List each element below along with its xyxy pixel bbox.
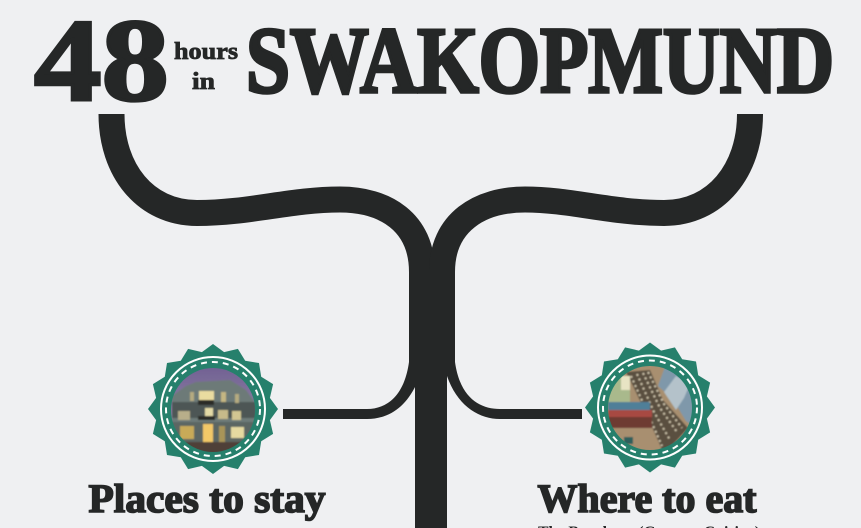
title small word hours: hours	[174, 39, 238, 65]
photo: seaside restaurant	[608, 366, 692, 450]
heading: places to stay: Places to stay	[88, 476, 326, 521]
badge white ring right	[598, 356, 702, 460]
upper left branch	[112, 114, 422, 272]
badge white ring left	[161, 357, 265, 461]
badge star right	[585, 342, 715, 472]
title small word in: in	[192, 69, 215, 95]
heading: where to eat: Where to eat	[538, 476, 757, 521]
title	[34, 0, 834, 126]
badge star left	[148, 344, 278, 474]
photo: hotel at dusk	[171, 368, 255, 452]
lower right branch	[446, 362, 582, 419]
badge: places to stay	[148, 344, 278, 474]
upper right branch	[442, 114, 750, 272]
badge: where to eat	[585, 342, 715, 472]
badge dashed ring left	[166, 362, 260, 456]
badge dashed ring right	[603, 360, 697, 454]
tree-shaped road diagram	[112, 114, 750, 528]
upper trunk	[409, 270, 455, 365]
lower left branch	[283, 362, 416, 419]
lower trunk	[415, 350, 447, 528]
